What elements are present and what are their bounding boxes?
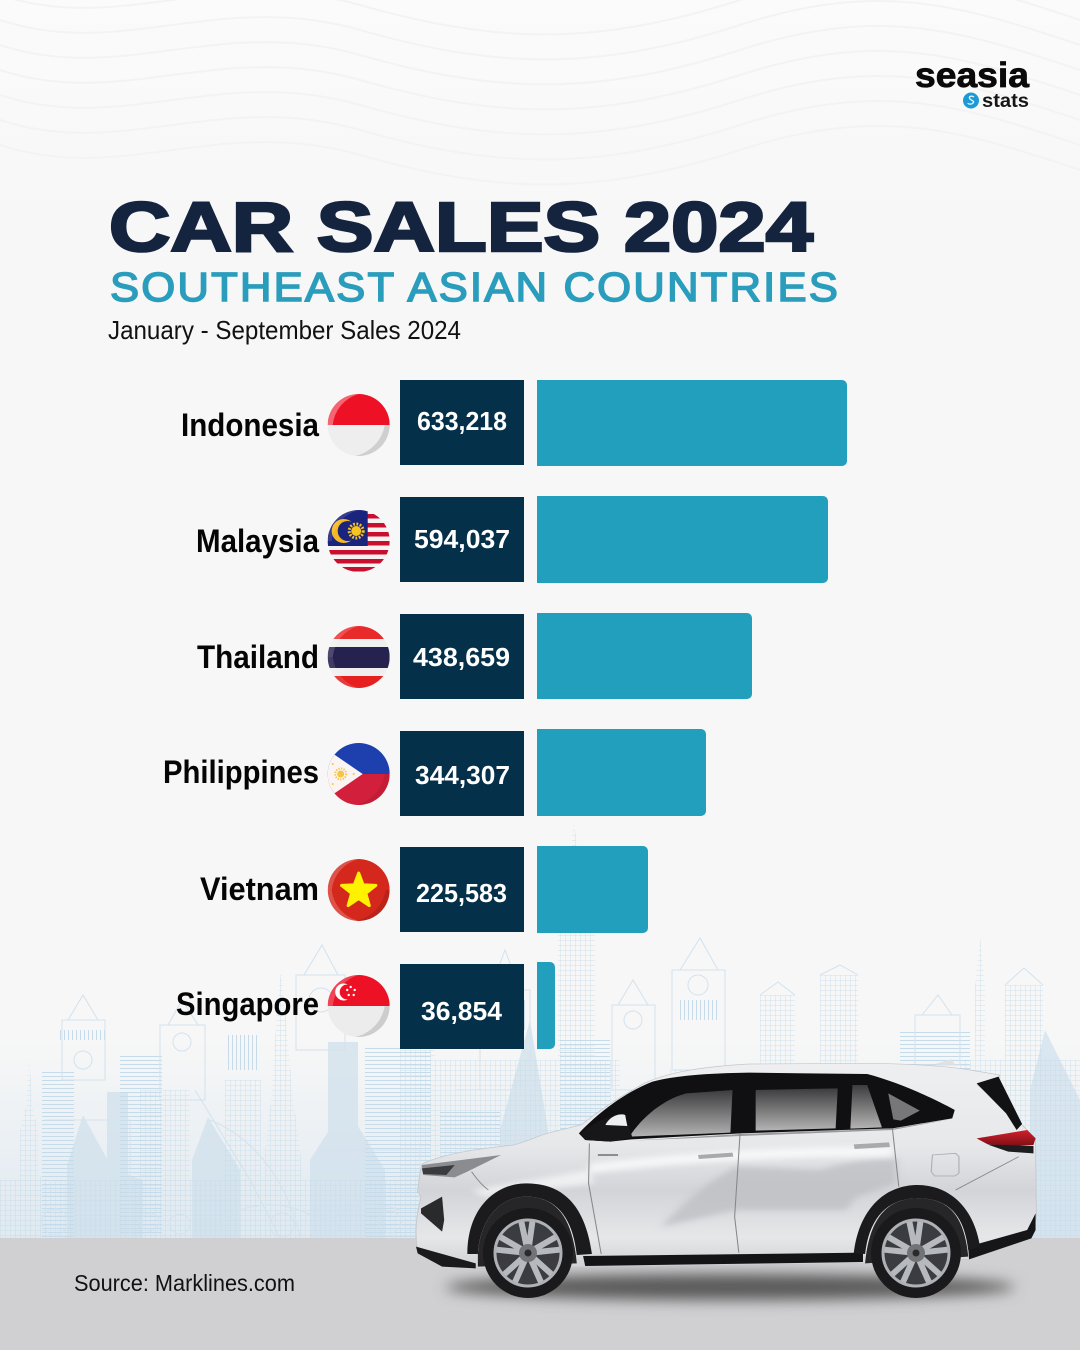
country label: Thailand: Thailand <box>197 639 319 675</box>
logo: seasia stats: stats <box>982 91 1029 112</box>
value: 633,218: 633,218 <box>417 406 507 436</box>
front wheel <box>483 1208 573 1298</box>
value box: 225,583 <box>400 847 524 932</box>
value: 225,583: 225,583 <box>416 878 507 908</box>
value: 36,854: 36,854 <box>421 996 503 1026</box>
row: Philippines <box>163 729 706 816</box>
bar: Thailand <box>537 613 752 699</box>
bar: Philippines <box>537 729 706 816</box>
country label: Vietnam: Vietnam <box>200 871 319 907</box>
bar: Malaysia <box>537 496 828 583</box>
country label: Singapore: Singapore <box>176 986 319 1022</box>
title: CAR SALES 2024 <box>109 188 813 266</box>
value: 438,659: 438,659 <box>413 642 510 672</box>
row: Vietnam <box>200 846 648 933</box>
bar: Vietnam <box>537 846 648 933</box>
rear wheel <box>871 1208 961 1298</box>
value box: 594,037 <box>400 497 524 582</box>
flag: Vietnam <box>328 859 390 921</box>
subtitle: SOUTHEAST ASIAN COUNTRIES <box>110 264 840 310</box>
skyline illustration <box>0 820 1080 1238</box>
value box: 344,307 <box>400 731 524 816</box>
bar: Indonesia <box>537 380 847 466</box>
flag: Indonesia <box>328 394 390 456</box>
value box: 36,854 <box>400 964 524 1049</box>
value box: 438,659 <box>400 614 524 699</box>
row: Malaysia <box>196 496 828 583</box>
country label: Indonesia: Indonesia <box>181 407 319 443</box>
flag: Malaysia <box>328 510 390 572</box>
value box: 633,218 <box>400 380 524 465</box>
bar: Singapore <box>537 962 555 1049</box>
flag: Singapore <box>328 975 390 1037</box>
row: Singapore <box>176 962 555 1049</box>
logo: seasia stats <box>915 56 1030 112</box>
date range text: January - September Sales 2024 <box>108 315 461 345</box>
source note: Source: Marklines.com <box>74 1270 295 1296</box>
ground strip <box>0 1238 1080 1350</box>
row: Indonesia <box>181 380 847 466</box>
car illustration: white SUV <box>416 1059 1036 1300</box>
country label: Philippines: Philippines <box>163 754 319 790</box>
value: 344,307: 344,307 <box>415 760 510 790</box>
value: 594,037: 594,037 <box>414 524 510 554</box>
flag: Thailand <box>328 626 390 688</box>
row: Thailand <box>197 613 752 699</box>
flag: Philippines <box>328 743 390 805</box>
logo: seasia stats: seasia <box>915 56 1030 95</box>
country label: Malaysia: Malaysia <box>196 523 319 559</box>
